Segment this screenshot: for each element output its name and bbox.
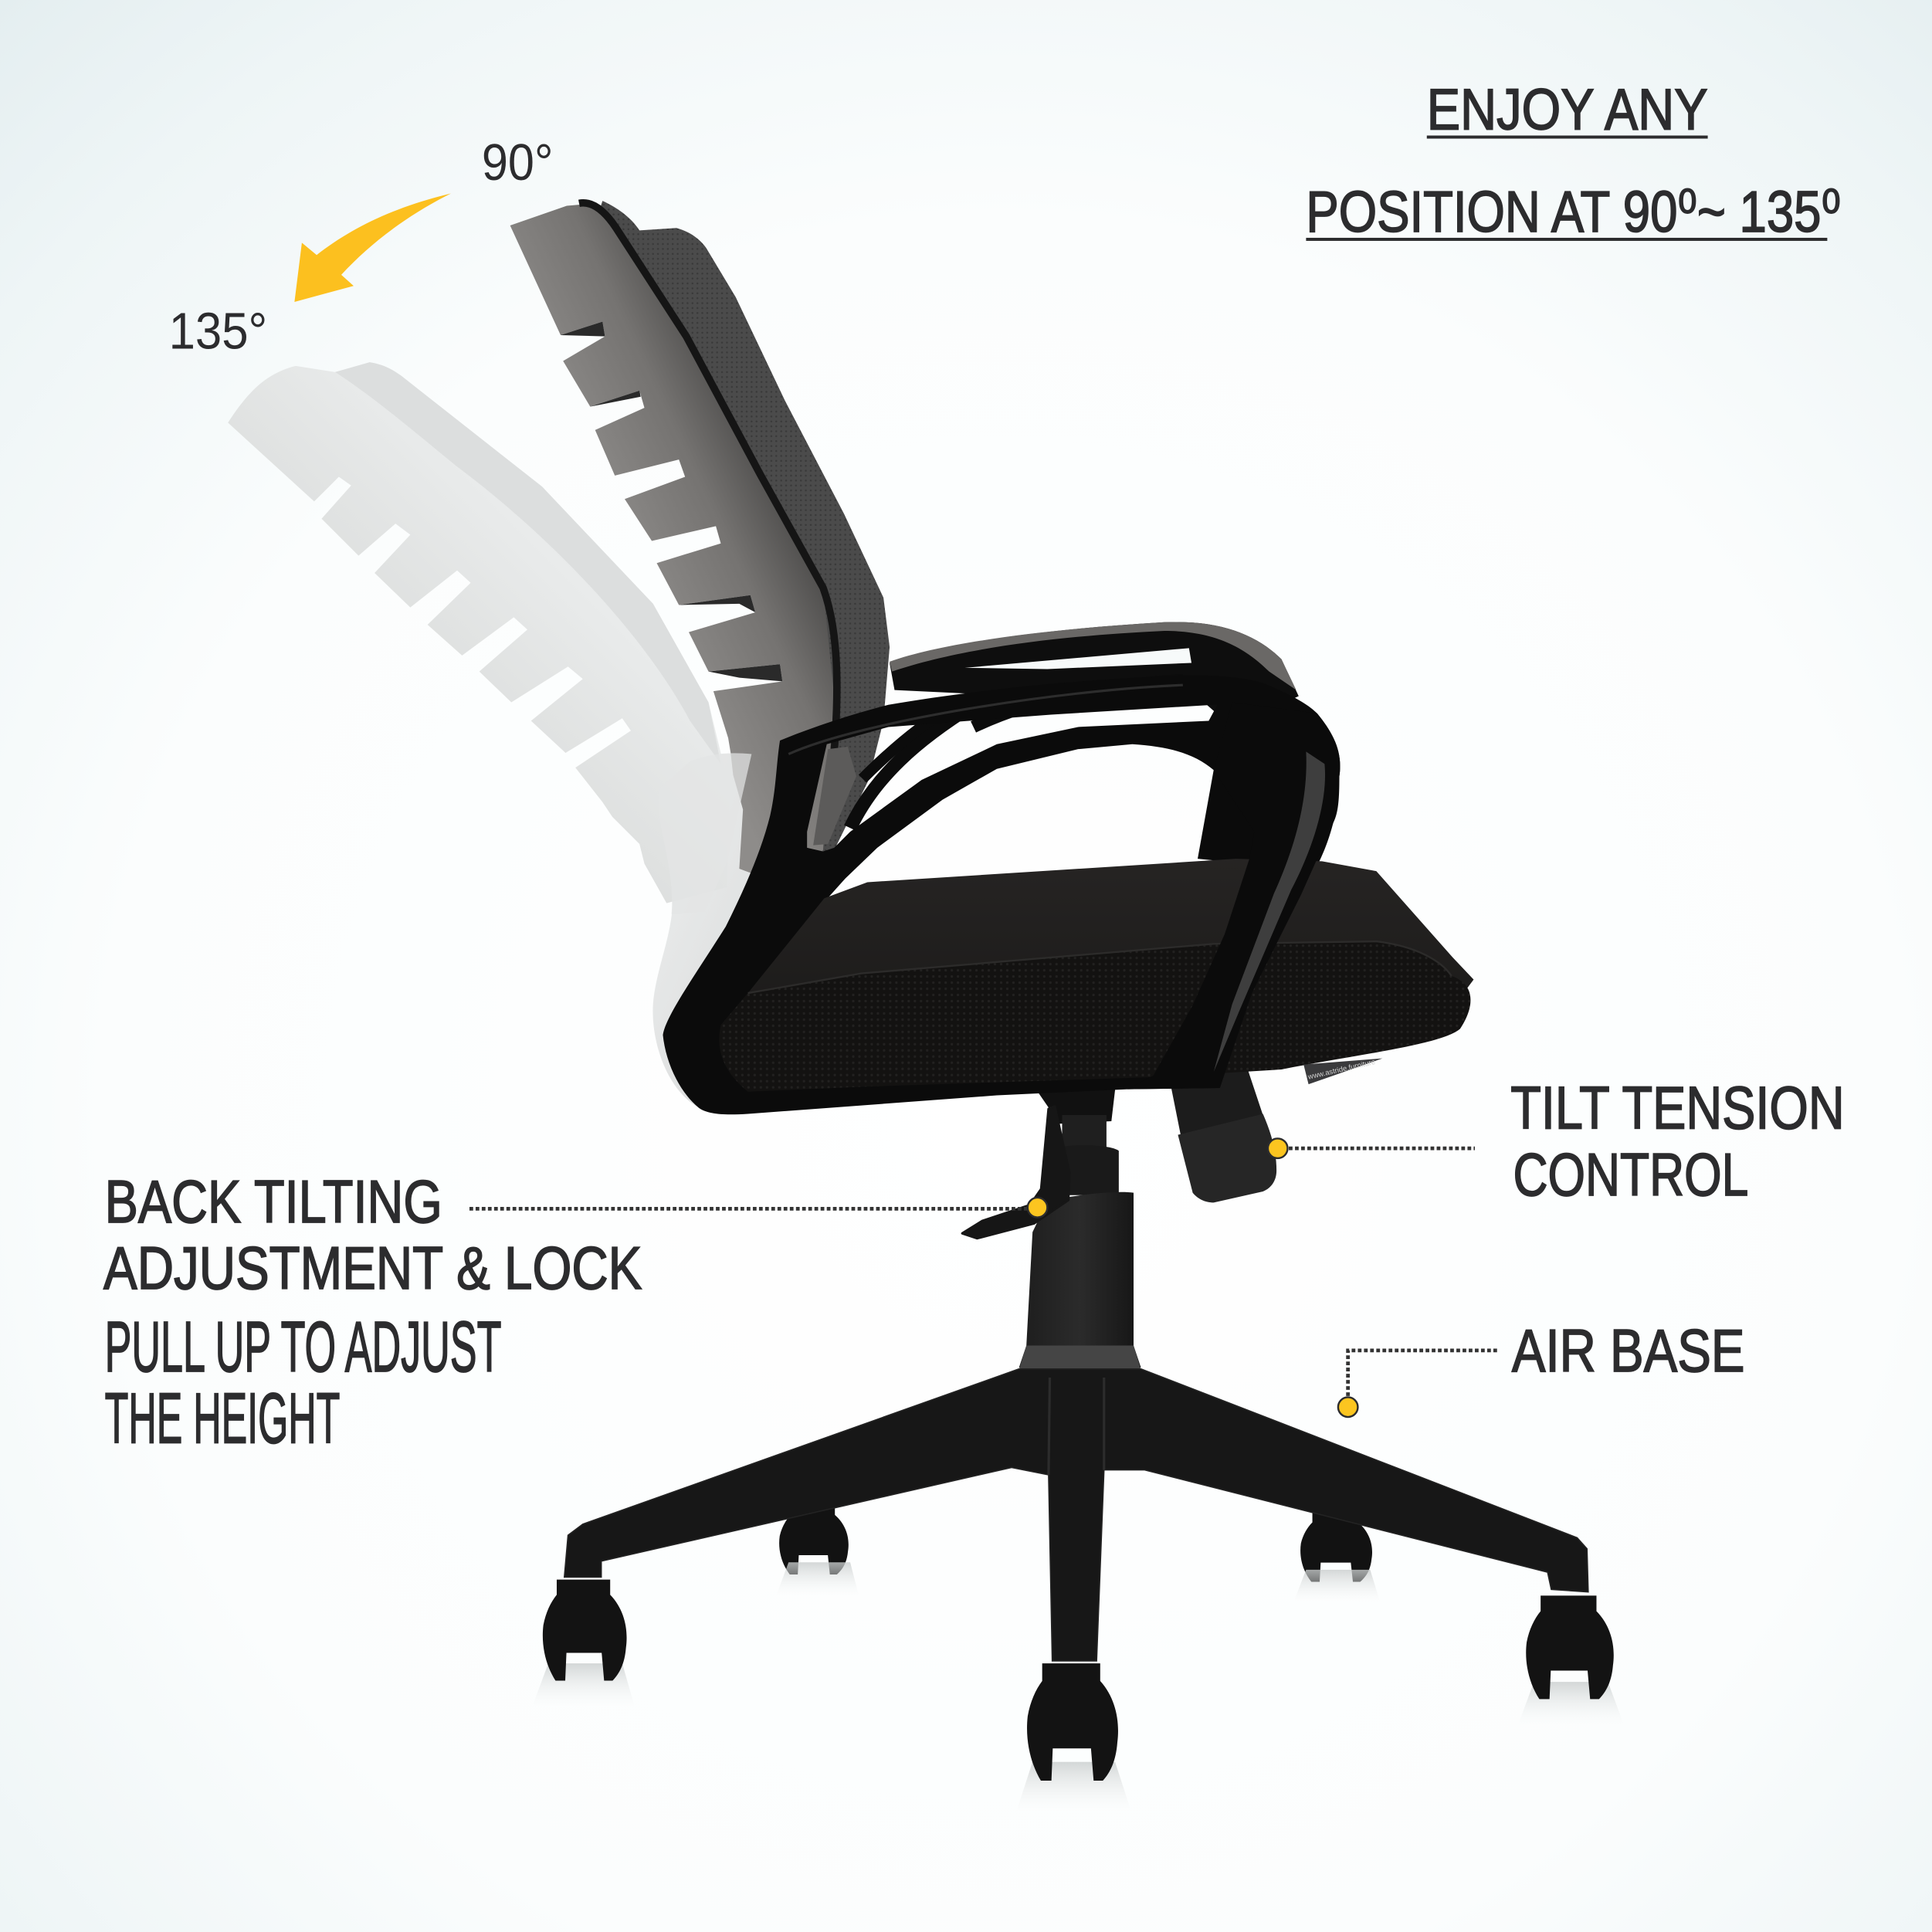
callout: tilt tension control: CONTROL (1513, 1141, 1748, 1208)
front arm post (1127, 703, 1340, 1090)
label: 135 degrees: 135° (169, 303, 267, 361)
gas lift column (1019, 1080, 1141, 1370)
text: pull up to adjust the height (105, 1307, 501, 1459)
upper sleeve (1045, 1145, 1119, 1195)
arm highlight (1214, 751, 1325, 1072)
mesh cushion (598, 201, 890, 863)
callout: tilt tension control (1268, 1074, 1845, 1208)
backrest at 90 degrees (510, 201, 890, 914)
front casters (543, 1580, 1614, 1781)
center leg ridges (1049, 1378, 1104, 1475)
heading: ENJOY ANY (1427, 77, 1708, 142)
collar (1019, 1345, 1141, 1370)
rear left caster (779, 1504, 849, 1574)
front right caster (1526, 1595, 1614, 1699)
icon: yellow recline arrow (294, 194, 451, 302)
heading: POSITION AT 90⁰~ 135⁰ (1306, 179, 1841, 244)
far armrest (890, 622, 1299, 727)
caster shadows (532, 1562, 1624, 1812)
callout: back tilting adjustment and lock: ADJUSTMENT & LOCK (103, 1234, 642, 1302)
seat seam (748, 941, 1452, 993)
ghost backrest at 135 degrees (228, 362, 813, 1114)
rear struts (850, 680, 1183, 828)
ghost shell with slots (228, 362, 730, 903)
callout: back tilting adjustment and lock (103, 1168, 1047, 1302)
rear casters (779, 1504, 1372, 1582)
tilt tension knob (1171, 1059, 1276, 1202)
grey back strip seen through arm (813, 747, 856, 846)
callout: tilt tension control: TILT TENSION (1510, 1074, 1845, 1142)
height adjustment lever (962, 1107, 1069, 1239)
seat label tag: www.astride.furniture (1307, 1058, 1376, 1082)
callout: air base: AIR BASE (1512, 1317, 1744, 1385)
mechanism under seat (1032, 1080, 1117, 1124)
heading (1306, 77, 1841, 244)
label: 90 degrees: 90° (482, 134, 553, 192)
inner tube (1062, 1115, 1107, 1152)
seat cushion (719, 859, 1473, 1092)
dark slot shadows (561, 321, 782, 681)
lower column (1019, 1192, 1141, 1368)
callout: back tilting adjustment and lock: BACK TILTING (105, 1168, 442, 1235)
seat side face (719, 941, 1470, 1092)
ghost overlay on lower back (658, 753, 751, 914)
front center caster (1027, 1663, 1118, 1781)
rear right caster (1300, 1512, 1372, 1582)
text: pull up to adjust the height: THE HEIGHT (105, 1378, 340, 1459)
seat top (720, 859, 1473, 1047)
arm top sheen (788, 685, 1183, 754)
front left caster (543, 1580, 627, 1680)
callout: air base (1338, 1317, 1744, 1417)
five star base (564, 1369, 1588, 1661)
near armrest frame and bottom rail (663, 675, 1340, 1114)
ghost mesh strip (335, 362, 720, 764)
shell with comb slots (510, 203, 834, 887)
ghost lower bracket (652, 754, 813, 1114)
black rib (579, 203, 837, 813)
text: pull up to adjust the height: PULL UP TO ADJUST (105, 1307, 501, 1387)
